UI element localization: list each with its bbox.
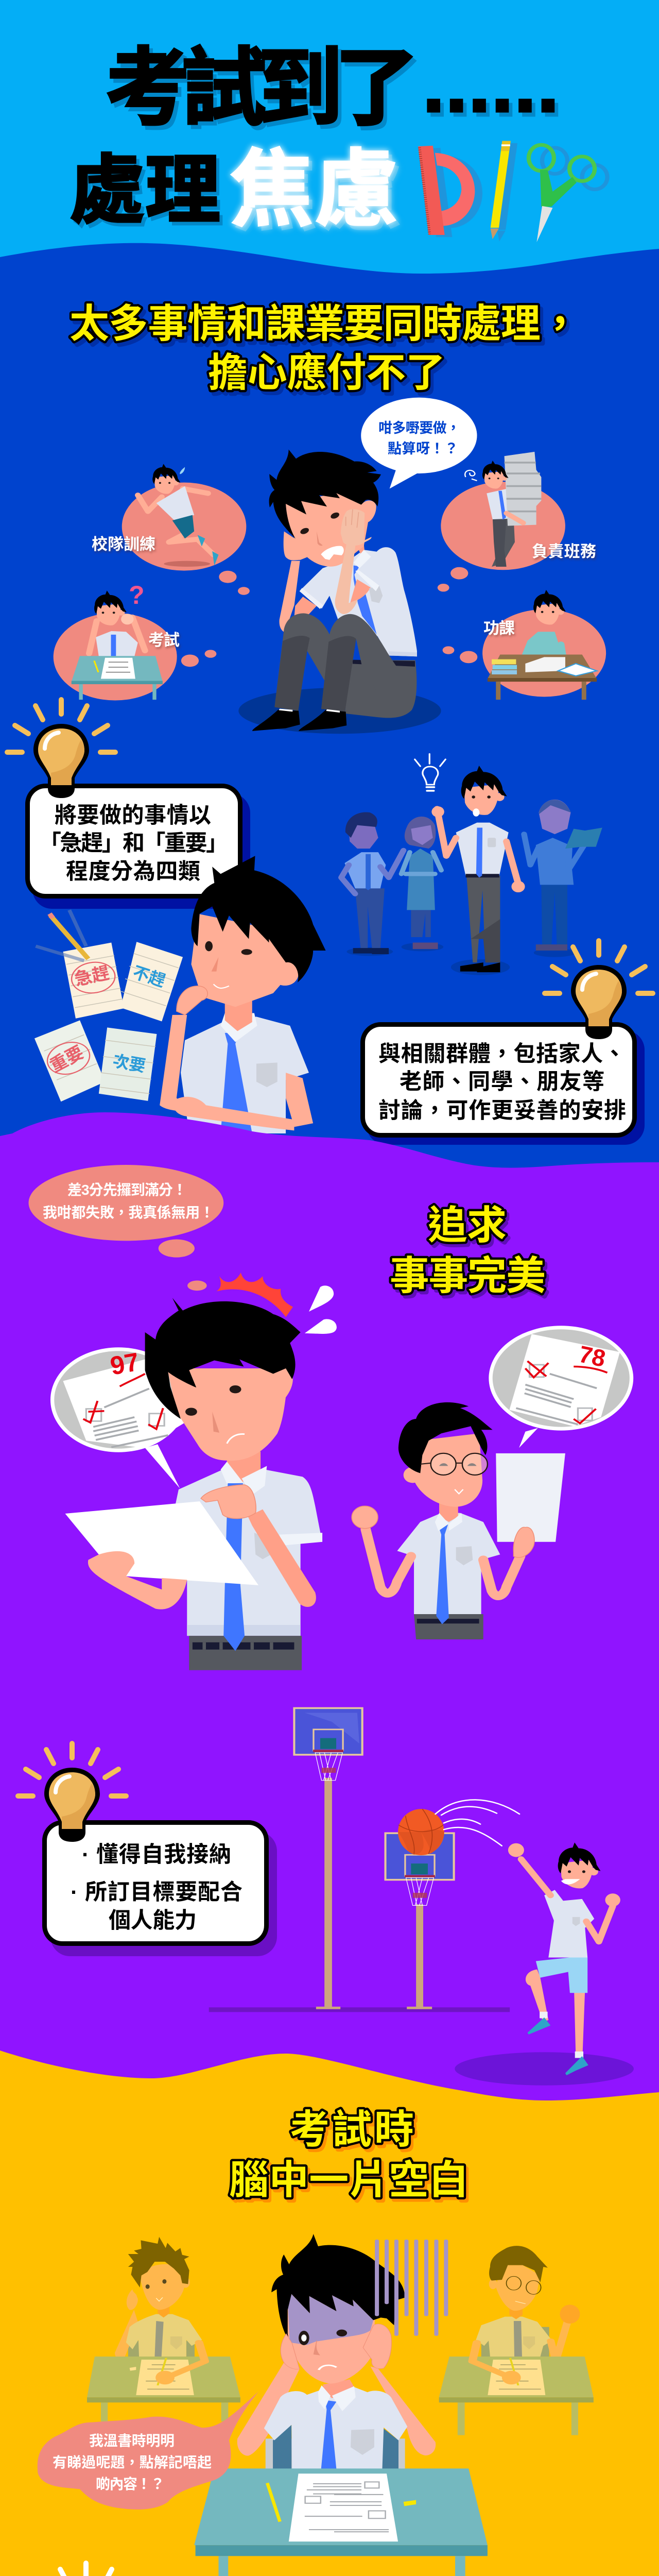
heading: blank mind during exams: 腦中一片空白: [229, 2158, 469, 2202]
thought bubbles: lower pair: [54, 567, 606, 701]
callout text: · 懂得自我接納: [82, 1842, 231, 1867]
thought bubble: team training: [122, 482, 565, 571]
blob text: 我溫書時明明: [89, 2433, 175, 2449]
section: yellow background: [0, 2050, 659, 2576]
thought bubble: perfectionism: [29, 1165, 223, 1291]
heading: too many things: [70, 302, 580, 395]
callout text: 討論，可作更妥善的安排: [378, 1098, 626, 1123]
chart bubble: 97 test paper: [50, 1347, 186, 1488]
jumping boy: [455, 1842, 634, 2086]
classmate right: [439, 2246, 594, 2435]
thought text: [43, 1182, 214, 1221]
notes: urgent and important: 重要: [47, 1043, 87, 1076]
notes: urgent and important: 次要: [111, 1052, 147, 1075]
title line 1: 考試到了: [105, 41, 419, 135]
blank-mind boy at exam desk: [194, 2234, 488, 2576]
shirt: [264, 2387, 407, 2469]
speech bubble text: 咁多嘢要做，: [378, 420, 460, 436]
head: [288, 2291, 375, 2384]
score 97: 97: [108, 1347, 141, 1381]
main worried boy: [238, 449, 441, 734]
speech blob: why can't I remember: [38, 2392, 258, 2510]
icon: bulb: [18, 1743, 126, 1842]
icon: scissors Y: [529, 145, 608, 242]
section: purple background: [0, 1112, 659, 2576]
notes: urgent and important: 不趕: [130, 963, 167, 991]
speech bubble text: 點算呀！？: [388, 441, 458, 456]
title line 2: 處理: 處理: [70, 148, 220, 232]
label: exam: 考試: [148, 631, 180, 649]
small boy with glasses: [352, 1402, 565, 1639]
heading: pursuing perfection: 事事完美: [390, 1254, 546, 1298]
label: class duties: 負責班務: [532, 543, 596, 561]
callout text: [39, 803, 228, 884]
speech bubble text: [378, 420, 460, 456]
callout text: 老師、同學、朋友等: [400, 1070, 604, 1094]
classmate left: [87, 2237, 240, 2421]
callout: accept yourself: [44, 1823, 277, 1956]
exam desk: [194, 2468, 488, 2576]
heading: too many things: 太多事情和課業要同時處理，: [70, 302, 580, 346]
chair: [266, 2438, 405, 2469]
callout: discuss with related groups: [362, 1024, 645, 1145]
icon: pencil I: [491, 141, 511, 239]
heading: pursuing perfection: 追求: [428, 1204, 507, 1248]
heading: blank mind during exams: 考試時: [290, 2108, 414, 2152]
callout text: · 所訂目標要配合: [71, 1880, 242, 1905]
callout text: 個人能力: [109, 1908, 197, 1933]
hoop near: [294, 1708, 362, 2009]
team discussion scene: [341, 754, 602, 975]
angry mark: [216, 1273, 293, 1317]
title line 1: [105, 37, 560, 135]
blob text: [53, 2433, 212, 2492]
blob text: 有睇過呢題，點解記唔起: [53, 2454, 212, 2470]
score 78: 78: [577, 1341, 608, 1372]
arms: [237, 2361, 300, 2456]
runner figure: [138, 464, 218, 567]
basketball hoops: [209, 1708, 519, 2012]
homework boy at desk: [488, 590, 597, 700]
teammate left: [341, 812, 404, 956]
hands: [281, 2334, 300, 2369]
heading: blank mind during exams: [229, 2108, 469, 2202]
callout text: [378, 1042, 626, 1123]
icon: bulb: [7, 700, 115, 798]
DIY stationery icons: [418, 141, 608, 242]
thought text: 我咁都失敗，我真係無用！: [43, 1204, 214, 1221]
callout text: 與相關群體，包括家人、: [378, 1042, 626, 1066]
thinking boy: [160, 856, 326, 1133]
label: team training: 校隊訓練: [92, 535, 155, 553]
thought text: 差3分先攞到滿分！: [67, 1182, 187, 1198]
notes: urgent and important: 急趕: [73, 963, 111, 990]
big disappointed boy: [65, 1273, 337, 1670]
heading: too many things: 擔心應付不了: [208, 351, 445, 395]
callout: sort tasks into four types: [28, 786, 250, 909]
speech bubble: [361, 398, 477, 488]
sweat drops: [309, 1285, 334, 1312]
icon: pink question mark: ?: [129, 581, 145, 609]
man with book: [524, 800, 602, 957]
title line 2: 焦慮: 焦慮: [229, 142, 399, 237]
chart bubble: 78 test paper: [489, 1326, 633, 1448]
callout text: 程度分為四類: [66, 859, 200, 884]
hoop far with ball: [386, 1800, 519, 2009]
icon: white lightbulb: [415, 754, 445, 791]
teacher: [402, 817, 443, 951]
heading: pursuing perfection: [390, 1204, 546, 1298]
paper stack figure: [465, 452, 541, 567]
callout text: 「急趕」和「重要」: [39, 831, 228, 856]
title line 1: ......: [422, 37, 560, 129]
notes: urgent and important: [34, 910, 183, 1101]
panel: worries scene: [54, 398, 606, 734]
despair lines: [377, 2241, 446, 2335]
label: homework: 功課: [483, 619, 515, 637]
center boy explaining: [431, 766, 525, 975]
exam boy at desk: [72, 590, 163, 700]
icon: bulb: [545, 941, 653, 1039]
blob text: 啲內容！？: [96, 2476, 165, 2492]
icon: ruler D: [418, 146, 475, 235]
dimmed classmates: [87, 2237, 594, 2435]
callout text: [71, 1842, 242, 1933]
callout text: 將要做的事情以: [55, 803, 211, 828]
icon: bulb: [32, 2563, 140, 2576]
